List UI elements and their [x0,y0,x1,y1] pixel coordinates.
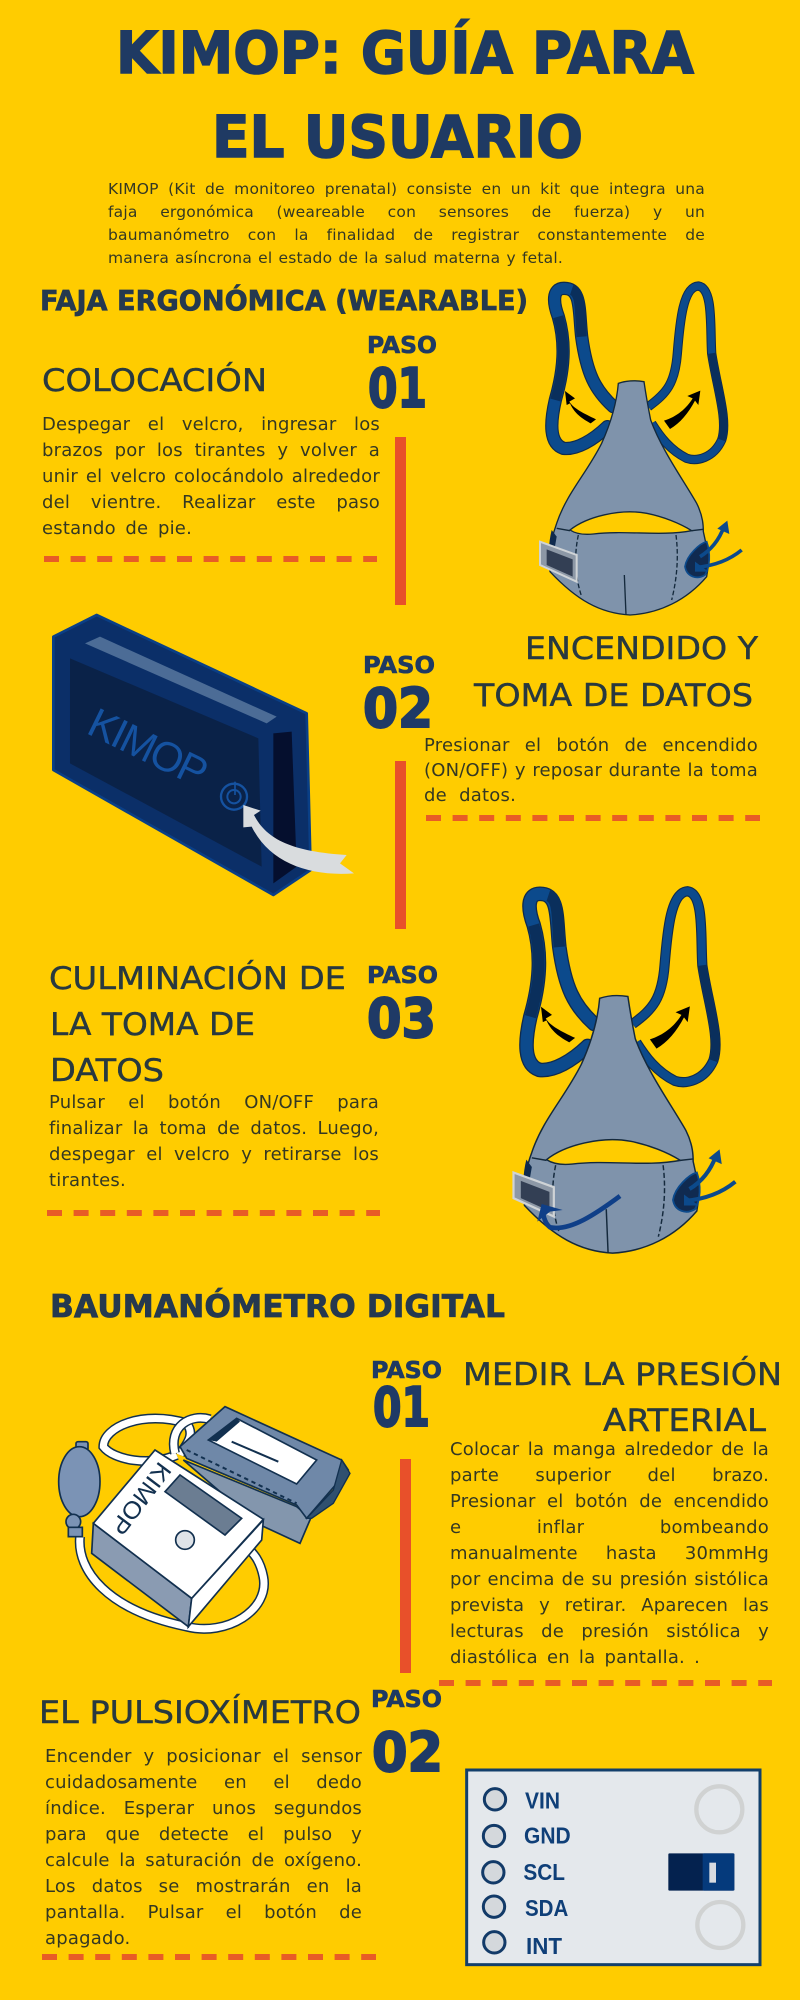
baumanómetro step 1 heading: ARTERIAL [603,1403,766,1439]
pulsioxímetro text: pantalla. Pulsar el botón de [45,1902,362,1923]
heading: faja ergonómica: FAJA ERGONÓMICA (WEARABLE) [40,283,528,317]
pulsioxímetro text: Encender y posicionar el sensor [45,1746,362,1767]
step 1 text: estando de pie. [42,518,192,539]
step 1 label: PASO [367,333,437,359]
step 1 text: Despegar el velcro, ingresar los [42,414,380,435]
pulsioxímetro text: apagado. [45,1928,130,1949]
step 2 heading: ENCENDIDO Y [525,631,759,667]
intro text [108,180,705,267]
illustration: faja with arms arrows [540,286,742,615]
baumanómetro step 1 text: Presionar el botón de encendido [450,1491,769,1512]
step 3 heading: LA TOMA DE [50,1007,255,1043]
step 1 text: brazos por los tirantes y volver a [42,440,380,461]
step 3 label: PASO [367,963,438,989]
pulsioxímetro step label: PASO [371,1687,442,1713]
illustration: kimop device [53,615,354,895]
step 3 heading: DATOS [50,1053,164,1089]
step 1 text: unir el velcro colocándolo alrededor [42,466,380,487]
step 2 text: de datos. [424,785,516,806]
baumanómetro step 1 heading: MEDIR LA PRESIÓN [463,1354,782,1393]
title: KIMOP: GUÍA PARA [116,19,694,87]
pulsioxímetro text: calcule la saturación de oxígeno. [45,1850,362,1871]
step 2 text [424,735,758,806]
step 2 number: 02 [363,677,433,740]
baumanómetro step 1 text: parte superior del brazo. [450,1465,769,1486]
baumanómetro step 1 dashed divider [439,1680,772,1686]
illustration: digital sphygmomanometer [59,1407,350,1629]
pulsioxímetro dashed divider [42,1954,376,1960]
illustration: pulse oximeter board: INT [526,1933,562,1959]
step 1 dashed divider [44,556,377,562]
pulsioxímetro text: índice. Esperar unos segundos [45,1798,362,1819]
pulsioxímetro text: Los datos se mostrarán en la [45,1876,362,1897]
step 2 dashed divider [426,815,760,821]
step 1 text [42,414,380,539]
illustration: pulse oximeter board: SDA [525,1895,568,1921]
title: EL USUARIO [212,104,583,171]
baumanómetro step 1 text: lecturas de presión sistólica y [450,1621,769,1642]
step 1 vertical bar [395,437,406,605]
step 3 text: Pulsar el botón ON/OFF para [49,1092,379,1113]
step 2 label: PASO [363,653,435,679]
step 2 text: Presionar el botón de encendido [424,735,758,756]
step 2 heading [473,631,759,714]
intro text: manera asíncrona el estado de la salud materna y fetal. [108,249,563,267]
illustration: pulse oximeter board: SCL [523,1859,565,1885]
step 1 text: del vientre. Realizar este paso [42,492,380,513]
step 2 vertical bar [395,761,406,929]
baumanómetro step 1 text: manualmente hasta 30mmHg [450,1543,769,1564]
step 3 heading: CULMINACIÓN DE [49,958,346,997]
baumanómetro step 1 text: diastólica en la pantalla. . [450,1647,700,1668]
step 3 text: despegar el velcro y retirarse los [49,1144,379,1165]
illustration: digital sphygmomanometer: KIMOP [104,1457,176,1540]
step 3 text: finalizar la toma de datos. Luego, [49,1118,379,1139]
illustration: kimop device: KIMOP [81,699,216,796]
baumanómetro step 1 text [450,1439,769,1668]
pulsioxímetro text: cuidadosamente en el dedo [45,1772,362,1793]
illustration: pulse oximeter board: GND [524,1822,571,1848]
step 2 heading: TOMA DE DATOS [473,678,753,714]
step 3 number: 03 [367,987,436,1050]
pulsioxímetro text: para que detecte el pulso y [45,1824,362,1845]
baumanómetro step 1 text: Colocar la manga alrededor de la [450,1439,769,1460]
heading: baumanómetro digital: BAUMANÓMETRO DIGITAL [50,1286,505,1325]
step 3 text: tirantes. [49,1170,126,1191]
step 3 text [49,1092,379,1191]
baumanómetro step 1 heading [463,1354,782,1439]
intro text: KIMOP (Kit de monitoreo prenatal) consiste en un kit que integra una [108,180,705,198]
illustration: pulse oximeter board [467,1770,760,1965]
baumanómetro step 1 label: PASO [371,1358,442,1384]
title [116,19,694,171]
baumanómetro step 1 text: e inflar bombeando [450,1517,769,1538]
illustration: pulse oximeter board: VIN [525,1787,560,1813]
step 1 heading: COLOCACIÓN [42,360,267,399]
baumanómetro step 1 text: prevista y retirar. Aparecen las [450,1595,769,1616]
intro text: baumanómetro con la finalidad de registrar constantemente de [108,226,705,244]
step 1 number: 01 [368,357,427,420]
baumanómetro step 1 text: por encima de su presión sistólica [450,1569,769,1590]
step 2 text: (ON/OFF) y reposar durante la toma [424,760,758,781]
step 3 dashed divider [47,1210,380,1216]
baumanómetro step 1 vertical bar [400,1459,411,1673]
illustration: faja with closing arrow [513,891,735,1253]
pulsioxímetro heading: EL PULSIOXÍMETRO [39,1693,361,1731]
step 3 heading [49,958,346,1089]
pulsioxímetro step number: 02 [372,1721,443,1784]
pulsioxímetro text [45,1746,362,1949]
intro text: faja ergonómica (weareable con sensores de fuerza) y un [108,203,705,221]
baumanómetro step 1 number: 01 [373,1376,430,1439]
